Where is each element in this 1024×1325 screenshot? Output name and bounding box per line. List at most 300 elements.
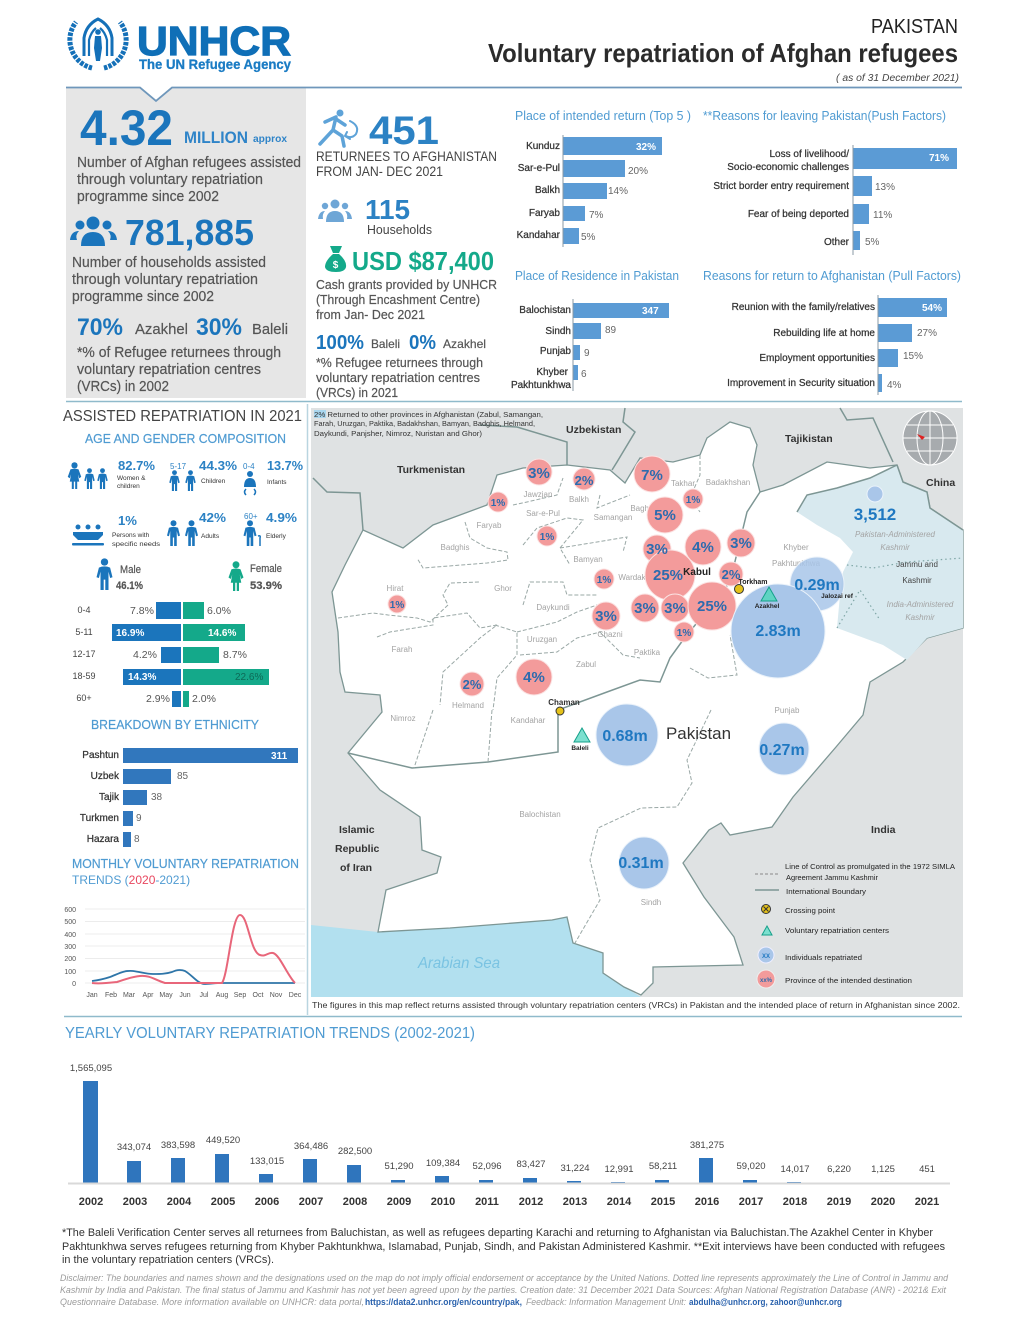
panel: cumulative figures since 2002: 781,885 — [125, 212, 254, 253]
country labels: China — [926, 477, 955, 489]
bar chart: breakdown by ethnicity: Turkmen — [80, 813, 119, 824]
title block: ( as of 31 December 2021) — [836, 72, 959, 84]
bar chart: place of intended return — [515, 108, 691, 247]
panel: returnees in 2021: voluntary repatriation centres — [316, 370, 480, 385]
bar chart: yearly voluntary repatriation trends: 2002 — [79, 1196, 103, 1208]
land: Afghanistan and Pakistan — [332, 422, 963, 995]
circles: province of intended destination: 1% — [540, 532, 554, 543]
bar chart: place of residence: Sindh — [545, 326, 571, 337]
bar chart: yearly voluntary repatriation trends: 2015 — [651, 1196, 675, 1208]
city labels and crossing points: Kabul — [683, 567, 711, 578]
line chart: monthly repatriation trends: 400 — [64, 932, 76, 939]
map legend: International Boundary — [786, 889, 867, 896]
map caption: The figures in this map reflect returns assisted through voluntary repatriation centers (VRCs) in Pakistan and the intended place of return in Afghanistan since 2002. — [312, 1000, 960, 1010]
bar chart: yearly voluntary repatriation trends: 2012 — [519, 1196, 543, 1208]
bar chart: pull factors: 4% — [887, 380, 902, 391]
bar chart: place of residence: 6 — [581, 369, 587, 380]
panel: cumulative figures since 2002: *% of Refugee returnees through — [77, 345, 281, 361]
country labels: Republic — [335, 843, 379, 855]
circles: province of intended destination: 4% — [692, 539, 714, 556]
population pyramid: 16.9% — [116, 628, 144, 639]
line chart: monthly repatriation trends: Jan — [86, 992, 98, 999]
panel: age and gender composition: 4.9% — [266, 510, 297, 525]
map: Afghanistan and Pakistan: Arabian Sea — [417, 955, 500, 972]
bar chart: yearly voluntary repatriation trends: 2018 — [783, 1196, 807, 1208]
bar chart: place of intended return: 32% — [636, 142, 656, 153]
bar chart: push factors: Socio-economic challenges — [727, 162, 849, 173]
line chart: monthly repatriation trends: 100 — [64, 969, 76, 976]
panel: age and gender composition: Children — [201, 478, 226, 485]
bar chart: yearly voluntary repatriation trends: 1,565,095 — [70, 1063, 112, 1074]
line chart: monthly repatriation trends: May — [159, 992, 173, 999]
bar chart: place of intended return: Kunduz — [526, 141, 560, 152]
circles: province of intended destination: 3% — [664, 600, 686, 617]
province labels: Farah — [392, 645, 412, 654]
line chart: monthly repatriation trends: Jul — [200, 992, 209, 999]
circles: individuals repatriated: 3,512 — [854, 505, 896, 524]
population pyramid: 12-17 — [72, 649, 96, 659]
bar chart: pull factors: 27% — [917, 328, 937, 339]
bar chart: yearly voluntary repatriation trends: 2020 — [871, 1196, 895, 1208]
province labels: Sar-e-Pul — [526, 509, 560, 518]
country labels: Islamic — [339, 824, 375, 836]
province labels: Faryab — [477, 521, 502, 530]
bar chart: push factors: 5% — [865, 237, 880, 248]
icon: male — [96, 558, 112, 590]
bar chart: place of intended return: 14% — [608, 186, 628, 197]
disclaimer: Kashmir by India and Pakistan. The final status of Jammu and Kashmir has not yet been agreed upon by the parties. Creation date: 31 December 2021 Data Sources: Afghan National Registration Database (ANR) - 2021& Exit — [60, 1285, 946, 1295]
circles: province of intended destination: 3% — [646, 541, 668, 558]
bar chart: place of intended return: 5% — [581, 232, 596, 243]
panel: returnees in 2021: *% Refugee returnees through — [316, 355, 483, 370]
bar chart: yearly voluntary repatriation trends: 2005 — [211, 1196, 235, 1208]
province labels: Helmand — [452, 701, 484, 710]
disclaimer: Feedback: Information Management Unit: — [526, 1297, 686, 1307]
country labels: Uzbekistan — [566, 424, 621, 436]
panel: returnees in 2021: RETURNEES TO AFGHANISTAN — [316, 149, 497, 164]
circles: province of intended destination: 4% — [523, 669, 545, 686]
circles: province of intended destination: 3% — [528, 465, 550, 482]
bar chart: place of residence: Khyber — [536, 367, 569, 378]
population pyramid: 4.2% — [133, 649, 157, 661]
province labels — [387, 478, 954, 907]
bar chart: yearly voluntary repatriation trends: 2008 — [343, 1196, 367, 1208]
bar chart: yearly voluntary repatriation trends: 2021 — [915, 1196, 939, 1208]
circles: individuals repatriated: 0.68m — [602, 728, 648, 745]
bar chart: yearly voluntary repatriation trends: 2007 — [299, 1196, 323, 1208]
bar chart: yearly voluntary repatriation trends: 133,015 — [250, 1156, 284, 1167]
bar chart: push factors: Loss of livelihood/ — [770, 149, 849, 160]
bar chart: yearly voluntary repatriation trends: 383,598 — [161, 1140, 195, 1151]
panel: cumulative figures since 2002: 70% — [77, 314, 123, 341]
bar chart: yearly voluntary repatriation trends: 451 — [919, 1164, 935, 1175]
circles: province of intended destination: 3% — [730, 535, 752, 552]
population pyramid: 2.0% — [192, 693, 216, 705]
bar chart: place of residence: Pakhtunkhwa — [511, 380, 571, 391]
bar chart: place of residence: 89 — [605, 325, 617, 336]
bar chart: push factors: Strict border entry requirement — [713, 181, 849, 192]
bar chart: place of intended return: Kandahar — [517, 230, 561, 241]
map legend: XX — [762, 954, 770, 960]
bar chart: place of residence: Place of Residence in Pakistan — [515, 268, 679, 283]
kashmir region — [797, 465, 963, 660]
city labels and crossing points: Jalozai ref — [821, 593, 854, 600]
bar chart: breakdown by ethnicity: 38 — [151, 792, 163, 803]
bar chart: yearly voluntary repatriation trends: 2003 — [123, 1196, 147, 1208]
province labels: Nimroz — [390, 714, 416, 723]
icon: children — [169, 470, 196, 491]
bar chart: place of intended return: Place of intended return (Top 5 ) — [515, 108, 691, 123]
panel: returnees in 2021: Baleli — [371, 337, 400, 351]
province labels: Khyber — [783, 543, 809, 552]
circles: province of intended destination: 25% — [653, 567, 683, 584]
bar chart: yearly voluntary repatriation trends: 109,384 — [426, 1158, 460, 1169]
line chart: monthly repatriation trends: 500 — [64, 919, 76, 926]
country labels: of Iran — [340, 862, 372, 874]
province labels: Badghis — [441, 543, 469, 552]
line chart: monthly repatriation trends: Oct — [253, 992, 263, 999]
icon: returning runner — [320, 110, 357, 146]
panel: age and gender composition: 5-17 — [170, 462, 187, 471]
bar chart: push factors: Other — [824, 237, 850, 248]
disclaimer: Disclaimer: The boundaries and names shown and the designations used on the map do not imply official endorsement or acceptance by the United Nations. Dotted line represents approximately the Line of Control in Jammu and — [60, 1273, 949, 1283]
bar chart: place of residence: Punjab — [540, 346, 571, 357]
province labels: Balochistan — [519, 810, 561, 819]
bar chart: pull factors: 54% — [922, 303, 942, 314]
panel: age and gender composition: Persons with — [112, 532, 150, 539]
bar chart: push factors — [703, 108, 957, 255]
line chart: monthly repatriation trends: 600 — [64, 907, 76, 914]
bar chart: yearly voluntary repatriation trends: 282,500 — [338, 1146, 372, 1157]
icon: people group — [70, 216, 117, 246]
province labels: Pakhtunkhwa — [772, 559, 821, 568]
panel: age and gender composition — [68, 431, 303, 707]
bar chart: pull factors: Employment opportunities — [759, 353, 875, 364]
bar chart: breakdown by ethnicity: Pashtun — [82, 750, 119, 761]
bar chart: pull factors: Reunion with the family/relatives — [732, 302, 875, 313]
line chart: monthly repatriation trends: Aug — [216, 992, 228, 999]
city labels and crossing points: Baleli — [571, 745, 589, 752]
panel: age and gender composition: Male — [120, 564, 141, 576]
bar chart: push factors: 71% — [929, 153, 949, 164]
panel: age and gender composition: Adults — [201, 533, 220, 540]
province labels: Hirat — [387, 584, 404, 593]
province labels: Samangan — [594, 513, 632, 522]
bar chart: pull factors: Improvement in Security situation — [727, 378, 875, 389]
country labels: Turkmenistan — [397, 464, 465, 476]
panel: returnees in 2021: (Through Encashment Centre) — [316, 292, 480, 307]
note: other provinces: Farah, Uruzgan, Paktika, Badakhshan, Bamyan, Badghis, Helmand, — [314, 421, 535, 428]
panel: age and gender composition: Elderly — [266, 533, 287, 540]
heading: assisted repatriation: ASSISTED REPATRIATION IN 2021 — [63, 408, 302, 425]
bar chart: yearly voluntary repatriation trends: 2017 — [739, 1196, 763, 1208]
panel: cumulative figures since 2002: 4.32 — [80, 100, 173, 156]
bar chart: yearly voluntary repatriation trends: 52,096 — [472, 1161, 502, 1172]
panel: returnees in 2021: 451 — [369, 109, 439, 153]
panel: age and gender composition: specific needs — [112, 541, 161, 548]
bar chart: yearly voluntary repatriation trends: 449,520 — [206, 1135, 240, 1146]
bar chart: breakdown by ethnicity: 9 — [136, 813, 142, 824]
note: other provinces: 2% Returned to other provinces in Afghanistan (Zabul, Samangan, — [314, 412, 543, 419]
panel: cumulative figures since 2002 — [66, 88, 962, 398]
note: other provinces — [314, 410, 543, 438]
country labels: Tajikistan — [785, 433, 833, 445]
circles: province of intended destination: 25% — [697, 598, 727, 615]
panel: returnees in 2021: Cash grants provided by UNHCR — [316, 277, 497, 292]
map legend: Agreement Jammu Kashmir — [786, 875, 879, 882]
bar chart: place of residence — [511, 268, 679, 391]
bar chart: breakdown by ethnicity: 85 — [177, 771, 189, 782]
icon: locator globe — [903, 411, 957, 465]
icon: money bag: $ — [333, 260, 339, 271]
footnote — [62, 1227, 945, 1266]
icon: households — [318, 200, 352, 222]
province labels: Punjab — [775, 706, 800, 715]
bar chart: breakdown by ethnicity: 8 — [134, 834, 140, 845]
panel: cumulative figures since 2002: Number of Afghan refugees assisted — [77, 155, 301, 171]
circles: province of intended destination: 1% — [686, 495, 700, 506]
panel: age and gender composition: AGE AND GENDER COMPOSITION — [85, 431, 286, 446]
bar chart: yearly voluntary repatriation trends: 58,211 — [649, 1161, 677, 1172]
circles: individuals repatriated: 0.27m — [759, 742, 805, 759]
bar chart: breakdown by ethnicity: 311 — [271, 751, 288, 762]
province labels: Badakhshan — [706, 478, 750, 487]
bar chart: push factors: Fear of being deported — [748, 209, 849, 220]
bar chart: yearly voluntary repatriation trends: 2010 — [431, 1196, 455, 1208]
circles: province of intended destination: 1% — [597, 575, 611, 586]
province labels: Kashmir — [902, 576, 932, 585]
panel: cumulative figures since 2002: voluntary repatriation centres — [77, 362, 261, 378]
line chart: monthly repatriation trends: 0 — [72, 981, 76, 988]
circles: province of intended destination: 2% — [463, 677, 482, 692]
country labels: India — [871, 824, 896, 836]
bar chart: pull factors: Reasons for return to Afghanistan (Pull Factors) — [703, 268, 961, 283]
panel: returnees in 2021 — [316, 109, 497, 400]
bar chart: yearly voluntary repatriation trends: 364,486 — [294, 1141, 328, 1152]
bar chart: yearly voluntary repatriation trends: 12,991 — [604, 1164, 634, 1175]
map: Afghanistan and Pakistan — [311, 408, 963, 997]
population pyramid: 60+ — [76, 693, 92, 703]
province labels: Zabul — [576, 660, 596, 669]
bar chart: yearly voluntary repatriation trends: 2013 — [563, 1196, 587, 1208]
disclaimer: abdulha@unhcr.org, zahoor@unhcr.org — [689, 1297, 842, 1307]
province labels: Ghazni — [597, 630, 623, 639]
map legend: Crossing point — [785, 908, 835, 915]
bar chart: push factors: 11% — [873, 210, 892, 221]
province labels: Jawzjan — [524, 490, 552, 499]
map legend: Province of the intended destination — [785, 978, 912, 985]
bar chart: pull factors: Rebuilding life at home — [773, 328, 875, 339]
province labels: India-Administered — [887, 600, 954, 609]
line chart: monthly repatriation trends: Sep — [234, 992, 246, 999]
title block: Voluntary repatriation of Afghan refugees — [488, 38, 958, 68]
city labels and crossing points — [548, 567, 854, 752]
bar chart: pull factors: 15% — [903, 351, 923, 362]
logo: UNHCR: UNHCR — [137, 18, 291, 64]
bar chart: yearly voluntary repatriation trends: 31,224 — [560, 1163, 590, 1174]
logo: UNHCR — [70, 18, 291, 72]
line chart: monthly repatriation trends: Dec — [289, 992, 302, 999]
panel: cumulative figures since 2002: programme since 2002 — [72, 289, 214, 305]
bar chart: yearly voluntary repatriation trends: 1,125 — [871, 1164, 895, 1175]
map legend — [755, 864, 955, 988]
population pyramid: 0-4 — [77, 605, 91, 615]
circles: province of intended destination: 1% — [677, 628, 691, 639]
panel: returnees in 2021: USD $87,400 — [352, 246, 494, 276]
line chart: monthly repatriation trends: MONTHLY VOLUNTARY REPATRIATION — [72, 856, 299, 871]
panel: returnees in 2021: 100% — [316, 332, 364, 354]
line chart: monthly repatriation trends: Jun — [179, 992, 191, 999]
icon: infant — [244, 471, 256, 495]
circles: individuals repatriated: 0.29m — [794, 577, 840, 594]
logo: UNHCR: The UN Refugee Agency — [139, 56, 291, 72]
line chart: monthly repatriation trends: Apr — [143, 992, 154, 999]
icon: elderly — [244, 520, 260, 546]
bar chart: breakdown by ethnicity: Tajik — [99, 792, 120, 803]
circles: province of intended destination: 3% — [595, 608, 617, 625]
bar chart: breakdown by ethnicity — [80, 717, 298, 847]
map: Afghanistan and Pakistan: Pakistan — [666, 724, 731, 743]
bar chart: yearly voluntary repatriation trends: 2009 — [387, 1196, 411, 1208]
panel: age and gender composition: 60+ — [244, 512, 258, 521]
bar chart: place of intended return: Faryab — [529, 208, 560, 219]
panel: age and gender composition: 46.1% — [116, 580, 143, 592]
bar chart: breakdown by ethnicity: BREAKDOWN BY ETHNICITY — [91, 717, 259, 732]
panel: age and gender composition: 44.3% — [199, 458, 237, 473]
icon: women and children — [68, 462, 108, 489]
bar chart: place of residence: 347 — [642, 306, 659, 317]
panel: cumulative figures since 2002: Number of households assisted — [72, 255, 266, 271]
footnote: in the voluntary repatriation centers (VRCs). — [62, 1254, 274, 1266]
province labels: Pakistan-Administered — [855, 530, 936, 539]
city labels and crossing points: Chaman — [548, 698, 580, 707]
panel: cumulative figures since 2002: approx — [253, 134, 287, 145]
circles: province of intended destination: 3% — [634, 600, 656, 617]
circles: province of intended destination: 1% — [491, 498, 505, 509]
icon: adults — [167, 520, 198, 546]
panel: age and gender composition: 53.9% — [250, 580, 282, 592]
country labels — [335, 424, 955, 874]
population pyramid: 7.8% — [130, 605, 154, 617]
bar chart: yearly voluntary repatriation trends — [65, 1025, 950, 1208]
panel: cumulative figures since 2002: (VRCs) in 2002 — [77, 379, 169, 395]
bar chart: place of intended return: 7% — [589, 210, 604, 221]
circles: province of intended destination: 1% — [390, 600, 404, 611]
city labels and crossing points: Torkham — [738, 579, 768, 586]
bar chart: breakdown by ethnicity: Uzbek — [91, 771, 120, 782]
panel: cumulative figures since 2002: 30% — [196, 314, 242, 341]
population pyramid: 14.3% — [128, 672, 156, 683]
panel: age and gender composition: children — [117, 483, 140, 490]
bar chart: yearly voluntary repatriation trends: 6,220 — [827, 1164, 851, 1175]
population pyramid: 14.6% — [208, 628, 236, 639]
bar chart: place of intended return: Balkh — [535, 185, 560, 196]
bar chart: yearly voluntary repatriation trends: 51,290 — [384, 1161, 414, 1172]
title block — [488, 16, 959, 84]
bar chart: place of intended return: Sar-e-Pul — [518, 163, 560, 174]
bar chart: yearly voluntary repatriation trends: 2019 — [827, 1196, 851, 1208]
bar chart: yearly voluntary repatriation trends: 381,275 — [690, 1140, 724, 1151]
bar chart: yearly voluntary repatriation trends: 83,427 — [516, 1159, 546, 1170]
population pyramid: 18-59 — [72, 671, 96, 681]
panel: returnees in 2021: 0% — [409, 332, 436, 354]
circles: individuals repatriated: 2.83m — [755, 623, 801, 640]
bar chart: yearly voluntary repatriation trends: 2014 — [607, 1196, 632, 1208]
city labels and crossing points: Azakhel — [755, 603, 779, 610]
panel: age and gender composition: Women & — [117, 475, 146, 482]
bar chart: breakdown by ethnicity: Hazara — [87, 834, 119, 845]
panel: age and gender composition: 13.7% — [267, 458, 303, 473]
bar chart: yearly voluntary repatriation trends: 59,020 — [736, 1161, 766, 1172]
bar chart: push factors: **Reasons for leaving Pakistan(Push Factors) — [703, 108, 946, 123]
disclaimer: Questionnaire Database. More information available on UNHCR: data portal, — [60, 1297, 364, 1307]
province labels: Paktika — [634, 648, 661, 657]
circles: province of intended destination: 5% — [654, 507, 676, 524]
map legend: Line of Control as promulgated in the 1972 SIMLA — [785, 864, 955, 871]
icon: money bag — [325, 246, 346, 272]
panel: returnees in 2021: Households — [367, 222, 432, 237]
panel: age and gender composition: 82.7% — [118, 458, 155, 473]
circles: province of intended destination: 2% — [722, 567, 741, 582]
province labels: Balkh — [569, 495, 589, 504]
population pyramid: 6.0% — [207, 605, 231, 617]
disclaimer: https://data2.unhcr.org/en/country/pak, — [365, 1297, 522, 1307]
population pyramid: 5-11 — [75, 627, 93, 637]
panel: returnees in 2021: 115 — [365, 194, 410, 225]
province labels: Sindh — [641, 898, 661, 907]
circles: individuals repatriated — [596, 486, 896, 889]
panel: cumulative figures since 2002: programme since 2002 — [77, 189, 219, 205]
bar chart: push factors: 13% — [875, 182, 895, 193]
population pyramid — [72, 602, 269, 707]
line chart: monthly repatriation trends — [64, 856, 305, 999]
line chart: monthly repatriation trends: 200 — [64, 956, 76, 963]
bar chart: place of intended return: 20% — [628, 166, 648, 177]
province labels: Takhar — [671, 479, 695, 488]
population pyramid: 2.9% — [146, 693, 170, 705]
circles: province of intended destination — [388, 456, 755, 696]
panel: age and gender composition: 0-4 — [243, 462, 255, 471]
bar chart: yearly voluntary repatriation trends: 14,017 — [780, 1164, 810, 1175]
province labels: Wardak — [618, 573, 647, 582]
province labels: Jammu and — [896, 560, 938, 569]
panel: cumulative figures since 2002: Baleli — [252, 321, 288, 338]
panel: cumulative figures since 2002: Azakhel — [135, 321, 188, 338]
panel: returnees in 2021: Azakhel — [443, 337, 486, 351]
province labels: Kashmir — [905, 613, 935, 622]
bar chart: yearly voluntary repatriation trends: 2016 — [695, 1196, 719, 1208]
line chart: monthly repatriation trends: Feb — [105, 992, 117, 999]
population pyramid: 8.7% — [223, 649, 247, 661]
province labels: Ghor — [494, 584, 512, 593]
panel: returnees in 2021: (VRCs) in 2021 — [316, 385, 398, 400]
icon: female — [228, 561, 244, 591]
map legend: Individuals repatriated — [785, 955, 862, 962]
map legend: Voluntary repatriation centers — [785, 928, 890, 935]
bar chart: yearly voluntary repatriation trends: 2006 — [255, 1196, 279, 1208]
line chart: monthly repatriation trends: Mar — [123, 992, 136, 999]
province labels: Uruzgan — [527, 635, 557, 644]
bar chart: yearly voluntary repatriation trends: 2011 — [475, 1196, 499, 1208]
note: other provinces: Daykundi, Panjsher, Nimroz, Nuristan and Ghor) — [314, 431, 482, 438]
population pyramid: 22.6% — [235, 672, 263, 683]
line chart: monthly repatriation trends: 300 — [64, 944, 76, 951]
bar chart: place of residence: Balochistan — [519, 305, 571, 316]
map legend: xx% — [760, 978, 773, 984]
footnote: Pakhtunkhwa serves refugees returning from Khyber Pakhtunkhwa, Islamabad, Punjab, Sindh, and Pakistan Administered Kashmir. **Exit interviews have been conducted with refugees — [62, 1241, 945, 1253]
panel: cumulative figures since 2002: MILLION — [184, 128, 248, 147]
panel: returnees in 2021: from Jan- Dec 2021 — [316, 307, 425, 322]
